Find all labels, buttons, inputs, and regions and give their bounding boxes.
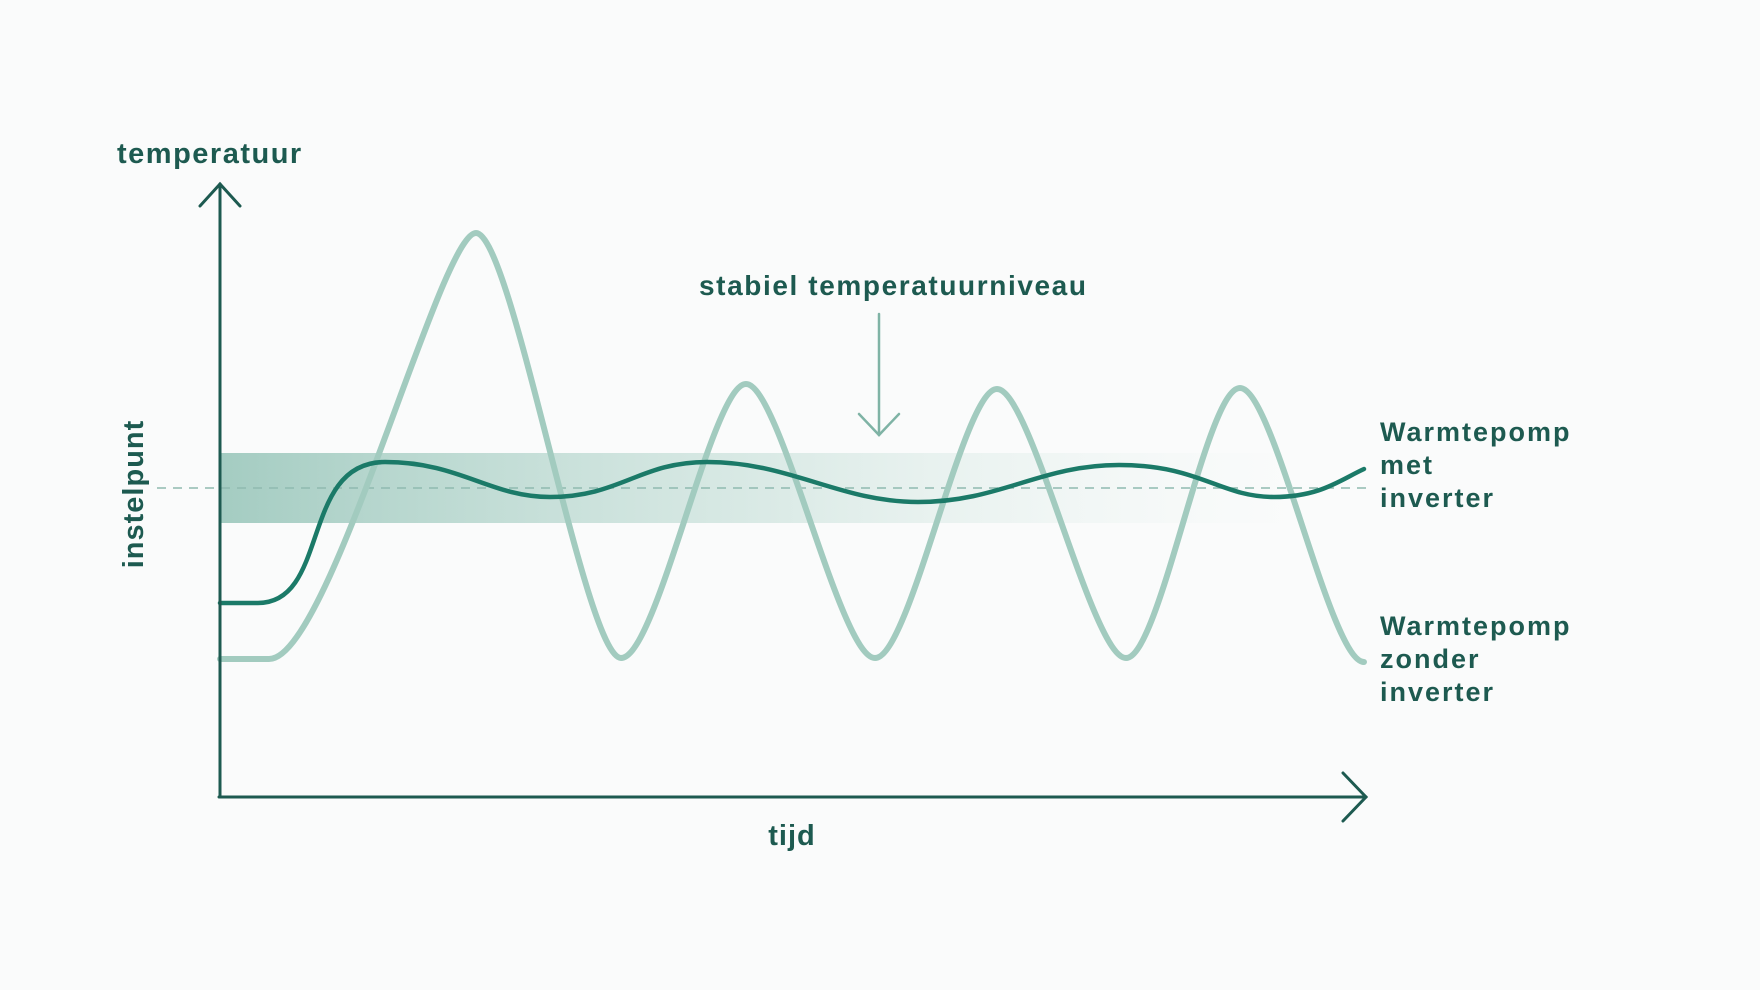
x axis with arrow — [219, 773, 1366, 821]
setpoint dashed line — [157, 487, 1367, 489]
label: met inverter: Warmtepomp — [1380, 417, 1572, 447]
curve: warmtepomp zonder inverter — [220, 233, 1364, 662]
y axis label: temperatuur — [117, 138, 303, 170]
arrow: pointing to band — [859, 314, 899, 435]
label: met inverter: inverter — [1380, 483, 1495, 513]
label: zonder inverter: Warmtepomp — [1380, 611, 1572, 641]
instelpunt label: instelpunt — [118, 420, 150, 568]
y axis with arrow — [200, 184, 240, 797]
label: zonder inverter: zonder — [1380, 644, 1481, 674]
x axis label: tijd — [768, 820, 816, 852]
label: met inverter: met — [1380, 450, 1434, 480]
label: zonder inverter: inverter — [1380, 677, 1495, 707]
band: stable temperature zone — [220, 453, 1300, 523]
curve: warmtepomp met inverter — [220, 462, 1364, 603]
callout: stabiel temperatuurniveau: stabiel temperatuurniveau — [699, 270, 1088, 301]
